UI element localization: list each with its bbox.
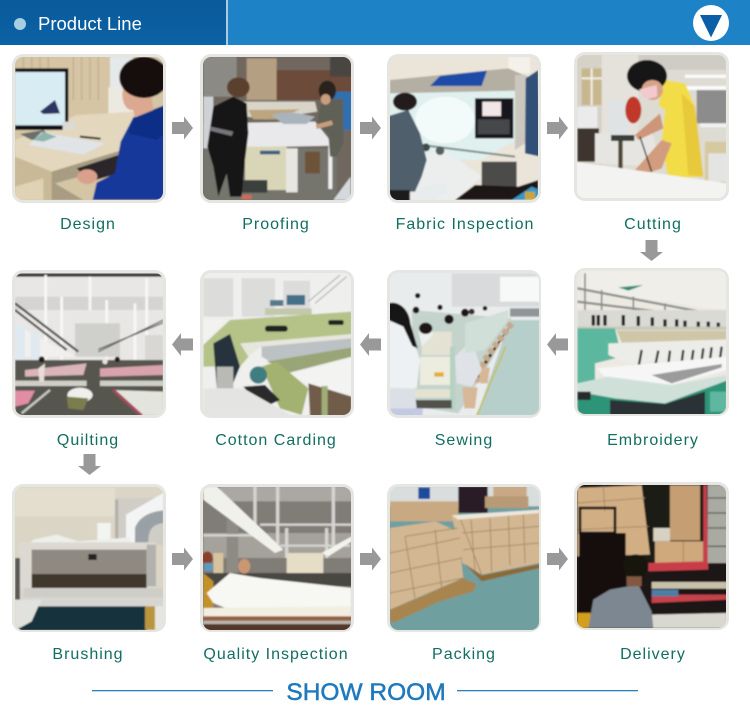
photo: quilting workshop — [12, 270, 167, 418]
arrow: left to Sewing — [547, 333, 568, 356]
arrow: left to Cotton Carding — [360, 333, 381, 356]
header banner — [0, 0, 750, 45]
step: Brushing — [12, 484, 167, 663]
step: Cutting — [574, 52, 729, 233]
arrow: down from Quilting — [78, 454, 101, 475]
section title: SHOW ROOM: SHOW ROOM — [286, 679, 446, 706]
step: Fabric Inspection — [387, 53, 542, 233]
photo: worker cutting fabric — [575, 53, 728, 202]
photo: loading delivery truck — [575, 483, 728, 631]
label: Fabric Inspection: Fabric Inspection — [396, 216, 534, 233]
label: Quilting: Quilting — [57, 432, 119, 449]
photo: quality inspection — [200, 485, 353, 633]
label: Proofing: Proofing — [242, 216, 310, 233]
label: Quality Inspection: Quality Inspection — [203, 646, 349, 663]
arrow — [547, 548, 568, 570]
arrow — [360, 116, 381, 140]
step: Quilting — [12, 270, 167, 449]
step: Quality Inspection — [200, 484, 354, 663]
heading: Product Line: Product Line — [38, 13, 142, 34]
photo: designer at computer — [13, 55, 169, 202]
label: Design: Design — [60, 216, 116, 233]
step: Packing — [387, 484, 543, 663]
label: Sewing: Sewing — [435, 432, 493, 449]
arrow — [360, 548, 381, 570]
arrow — [547, 116, 568, 140]
arrow: left to Quilting — [172, 333, 193, 356]
label: Cotton Carding: Cotton Carding — [215, 432, 337, 449]
label: Delivery: Delivery — [620, 646, 686, 663]
photo: brushing machine — [12, 485, 167, 633]
label: Brushing: Brushing — [52, 646, 124, 663]
label: Embroidery: Embroidery — [607, 432, 699, 449]
photo: carding machine — [200, 270, 353, 418]
icon: down triangle badge — [693, 5, 729, 41]
photo: packed cartons on pallets — [387, 485, 543, 633]
step: Delivery — [574, 482, 729, 663]
label: Packing: Packing — [432, 646, 496, 663]
step: Cotton Carding — [200, 270, 354, 449]
photo: embroidery machines — [575, 268, 728, 417]
step: Embroidery — [574, 268, 729, 449]
photo: proofing table — [200, 55, 353, 202]
step: Design — [12, 54, 169, 233]
arrow — [172, 116, 193, 140]
step: Sewing — [387, 270, 543, 449]
step: Proofing — [200, 54, 354, 233]
photo: fabric inspection machine — [387, 53, 542, 202]
header bullet dot — [14, 18, 26, 30]
photo: sewing line — [387, 270, 543, 418]
arrow: down from Cutting — [640, 240, 663, 261]
label: Cutting: Cutting — [624, 216, 682, 233]
arrow — [172, 548, 193, 570]
